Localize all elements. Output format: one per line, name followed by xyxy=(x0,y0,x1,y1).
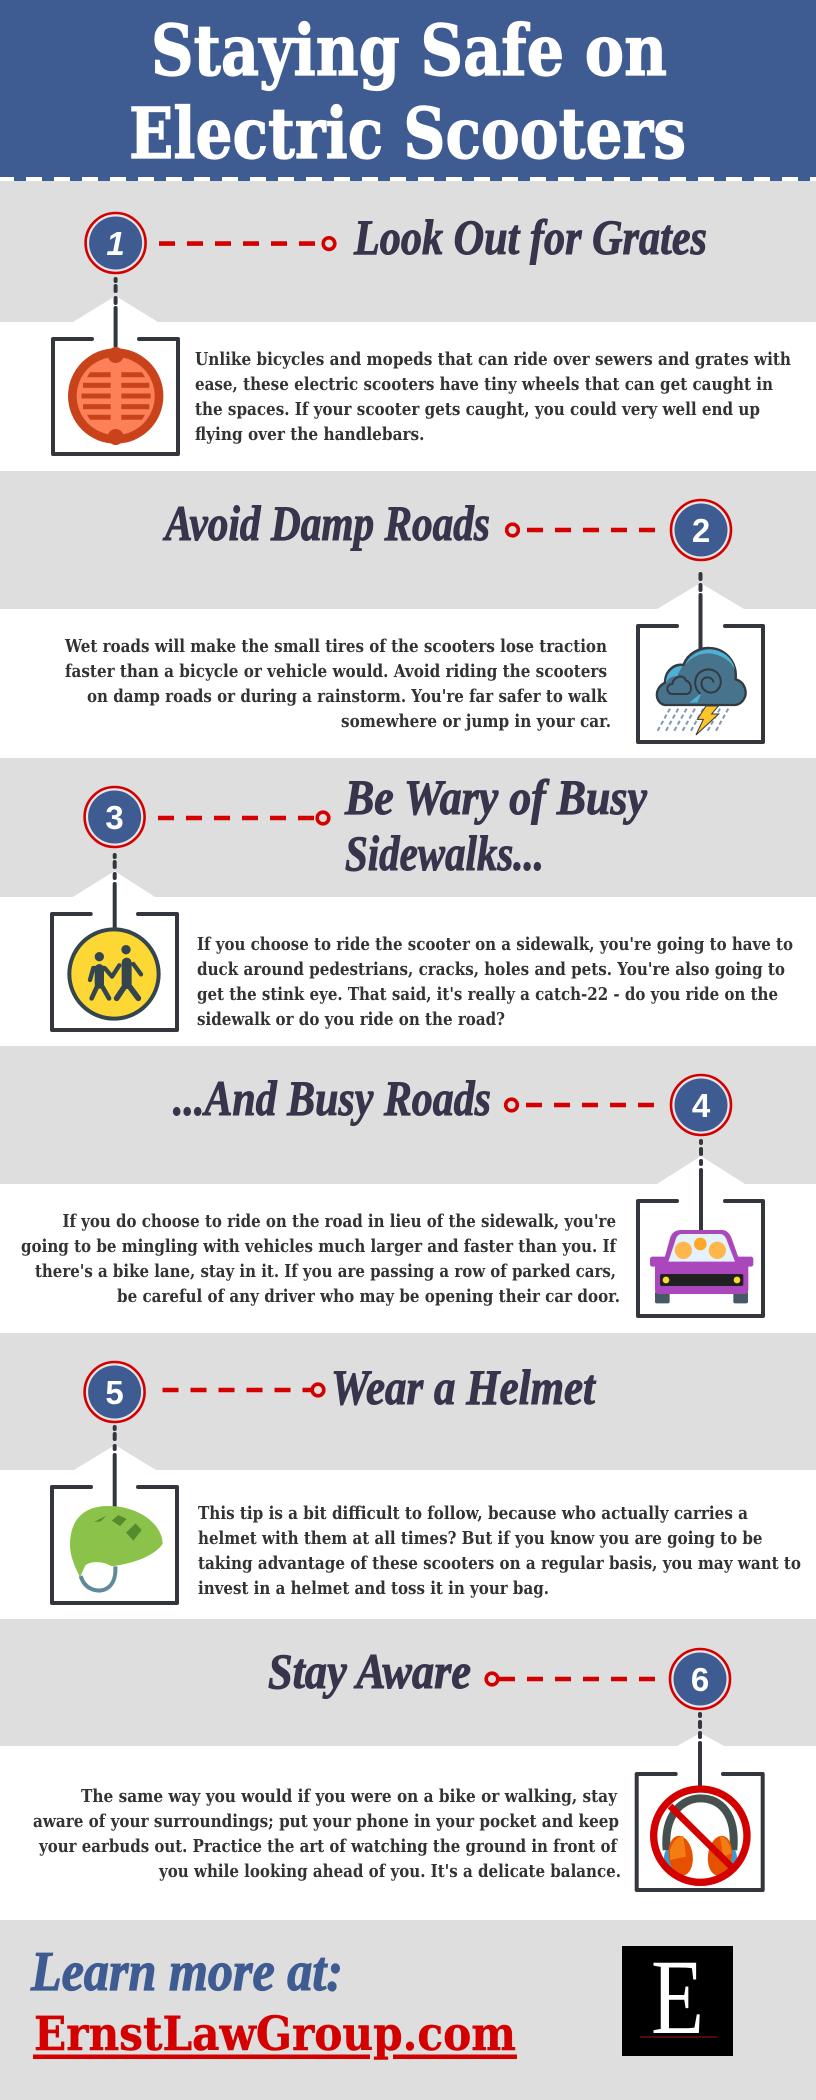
body text 5: invest in a helmet and toss it in your bag. xyxy=(198,1578,549,1599)
body text 2: Wet roads will make the small tires of the scooters lose traction xyxy=(64,636,607,657)
connector to heading 2 xyxy=(507,524,655,536)
icon: helmet xyxy=(70,1506,163,1591)
body text 1 xyxy=(195,349,791,445)
panel: footer xyxy=(0,1920,816,2100)
body text 1: flying over the handlebars. xyxy=(195,424,424,445)
body text 6: you while looking ahead of you. It's a delicate balance. xyxy=(158,1861,621,1882)
body text 4: be careful of any driver who may be opening their car door. xyxy=(117,1286,620,1307)
header banner xyxy=(0,0,816,181)
body text 3: sidewalk or do you ride on the road? xyxy=(197,1009,505,1030)
icon frame and connector 4 xyxy=(638,1141,763,1316)
icon: car xyxy=(650,1230,753,1303)
title: Staying Safe on xyxy=(151,9,667,92)
panel: tip 6 stay aware xyxy=(0,1619,816,1890)
body text 2: faster than a bicycle or vehicle would. Avoid riding the scooters xyxy=(65,661,607,682)
number badge 2: 2 xyxy=(692,512,710,549)
panel: tip 3 busy sidewalks xyxy=(0,758,816,1030)
connector to heading 4 xyxy=(506,1099,655,1111)
number badge 6 xyxy=(670,1649,730,1709)
connector to heading 5 xyxy=(162,1384,324,1396)
panel: tip 2 avoid damp roads xyxy=(0,471,816,742)
number badge 5 xyxy=(85,1362,145,1422)
icon frame and connector 3 xyxy=(52,855,177,1030)
icon frame and connector 1 xyxy=(53,279,178,454)
body text 4: there's a bike lane, stay in it. If you are passing a row of parked cars, xyxy=(35,1261,616,1282)
heading 3 xyxy=(344,769,648,881)
learn more text: Learn more at: xyxy=(30,1941,343,2003)
logo xyxy=(622,1939,733,2057)
number badge 4: 4 xyxy=(692,1087,711,1124)
logo: E xyxy=(651,1939,704,2057)
body text 3 xyxy=(197,934,793,1030)
icon: storm cloud xyxy=(657,648,746,735)
number badge 4 xyxy=(671,1075,731,1135)
number badge 3 xyxy=(85,787,145,847)
heading 1: Look Out for Grates xyxy=(353,209,707,265)
body text 5 xyxy=(198,1503,801,1599)
connector to heading 6 xyxy=(486,1673,655,1685)
icon frame and connector 2 xyxy=(638,574,763,742)
heading 3: Be Wary of Busy xyxy=(344,769,648,825)
body text 2: on damp roads or during a rainstorm. You're far safer to walk xyxy=(87,686,607,707)
icon frame and connector 6 xyxy=(637,1714,763,1890)
heading 6: Stay Aware xyxy=(268,1643,471,1699)
connector to heading 3 xyxy=(158,812,329,824)
icon frame and connector 5 xyxy=(52,1427,177,1603)
number badge 1: 1 xyxy=(106,225,125,262)
panel: tip 5 wear a helmet xyxy=(0,1333,816,1603)
icon: sewer grate xyxy=(68,347,163,445)
number badge 3: 3 xyxy=(105,799,124,836)
heading 4: ...And Busy Roads xyxy=(173,1070,491,1126)
body text 4 xyxy=(21,1211,620,1307)
title: Electric Scooters xyxy=(129,92,686,175)
body text 6: your earbuds out. Practice the art of watching the ground in front of xyxy=(38,1836,618,1857)
body text 4: going to be mingling with vehicles much larger and faster than you. If xyxy=(21,1236,617,1257)
icon: pedestrians sign xyxy=(69,929,159,1019)
body text 6 xyxy=(33,1786,621,1882)
icon: no headphones xyxy=(654,1789,747,1882)
number badge 6: 6 xyxy=(691,1661,709,1698)
heading 5: Wear a Helmet xyxy=(331,1359,597,1415)
website link: ErnstLawGroup.com xyxy=(34,2007,516,2062)
body text 2: somewhere or jump in your car. xyxy=(341,711,611,732)
title xyxy=(129,9,686,175)
panel: tip 1 look out for grates xyxy=(0,181,816,454)
body text 6: The same way you would if you were on a bike or walking, stay xyxy=(81,1786,617,1807)
connector to heading 1 xyxy=(159,238,335,249)
number badge 5: 5 xyxy=(105,1374,124,1411)
number badge 2 xyxy=(671,500,731,560)
number badge 1 xyxy=(86,213,146,273)
rain xyxy=(657,709,728,731)
panel: tip 4 busy roads xyxy=(0,1046,816,1316)
body text 2 xyxy=(64,636,611,732)
heading 3: Sidewalks... xyxy=(345,825,544,881)
heading 2: Avoid Damp Roads xyxy=(163,495,490,551)
body text 4: If you do choose to ride on the road in lieu of the sidewalk, you're xyxy=(62,1211,616,1232)
body text 6: aware of your surroundings; put your phone in your pocket and keep xyxy=(33,1811,619,1832)
